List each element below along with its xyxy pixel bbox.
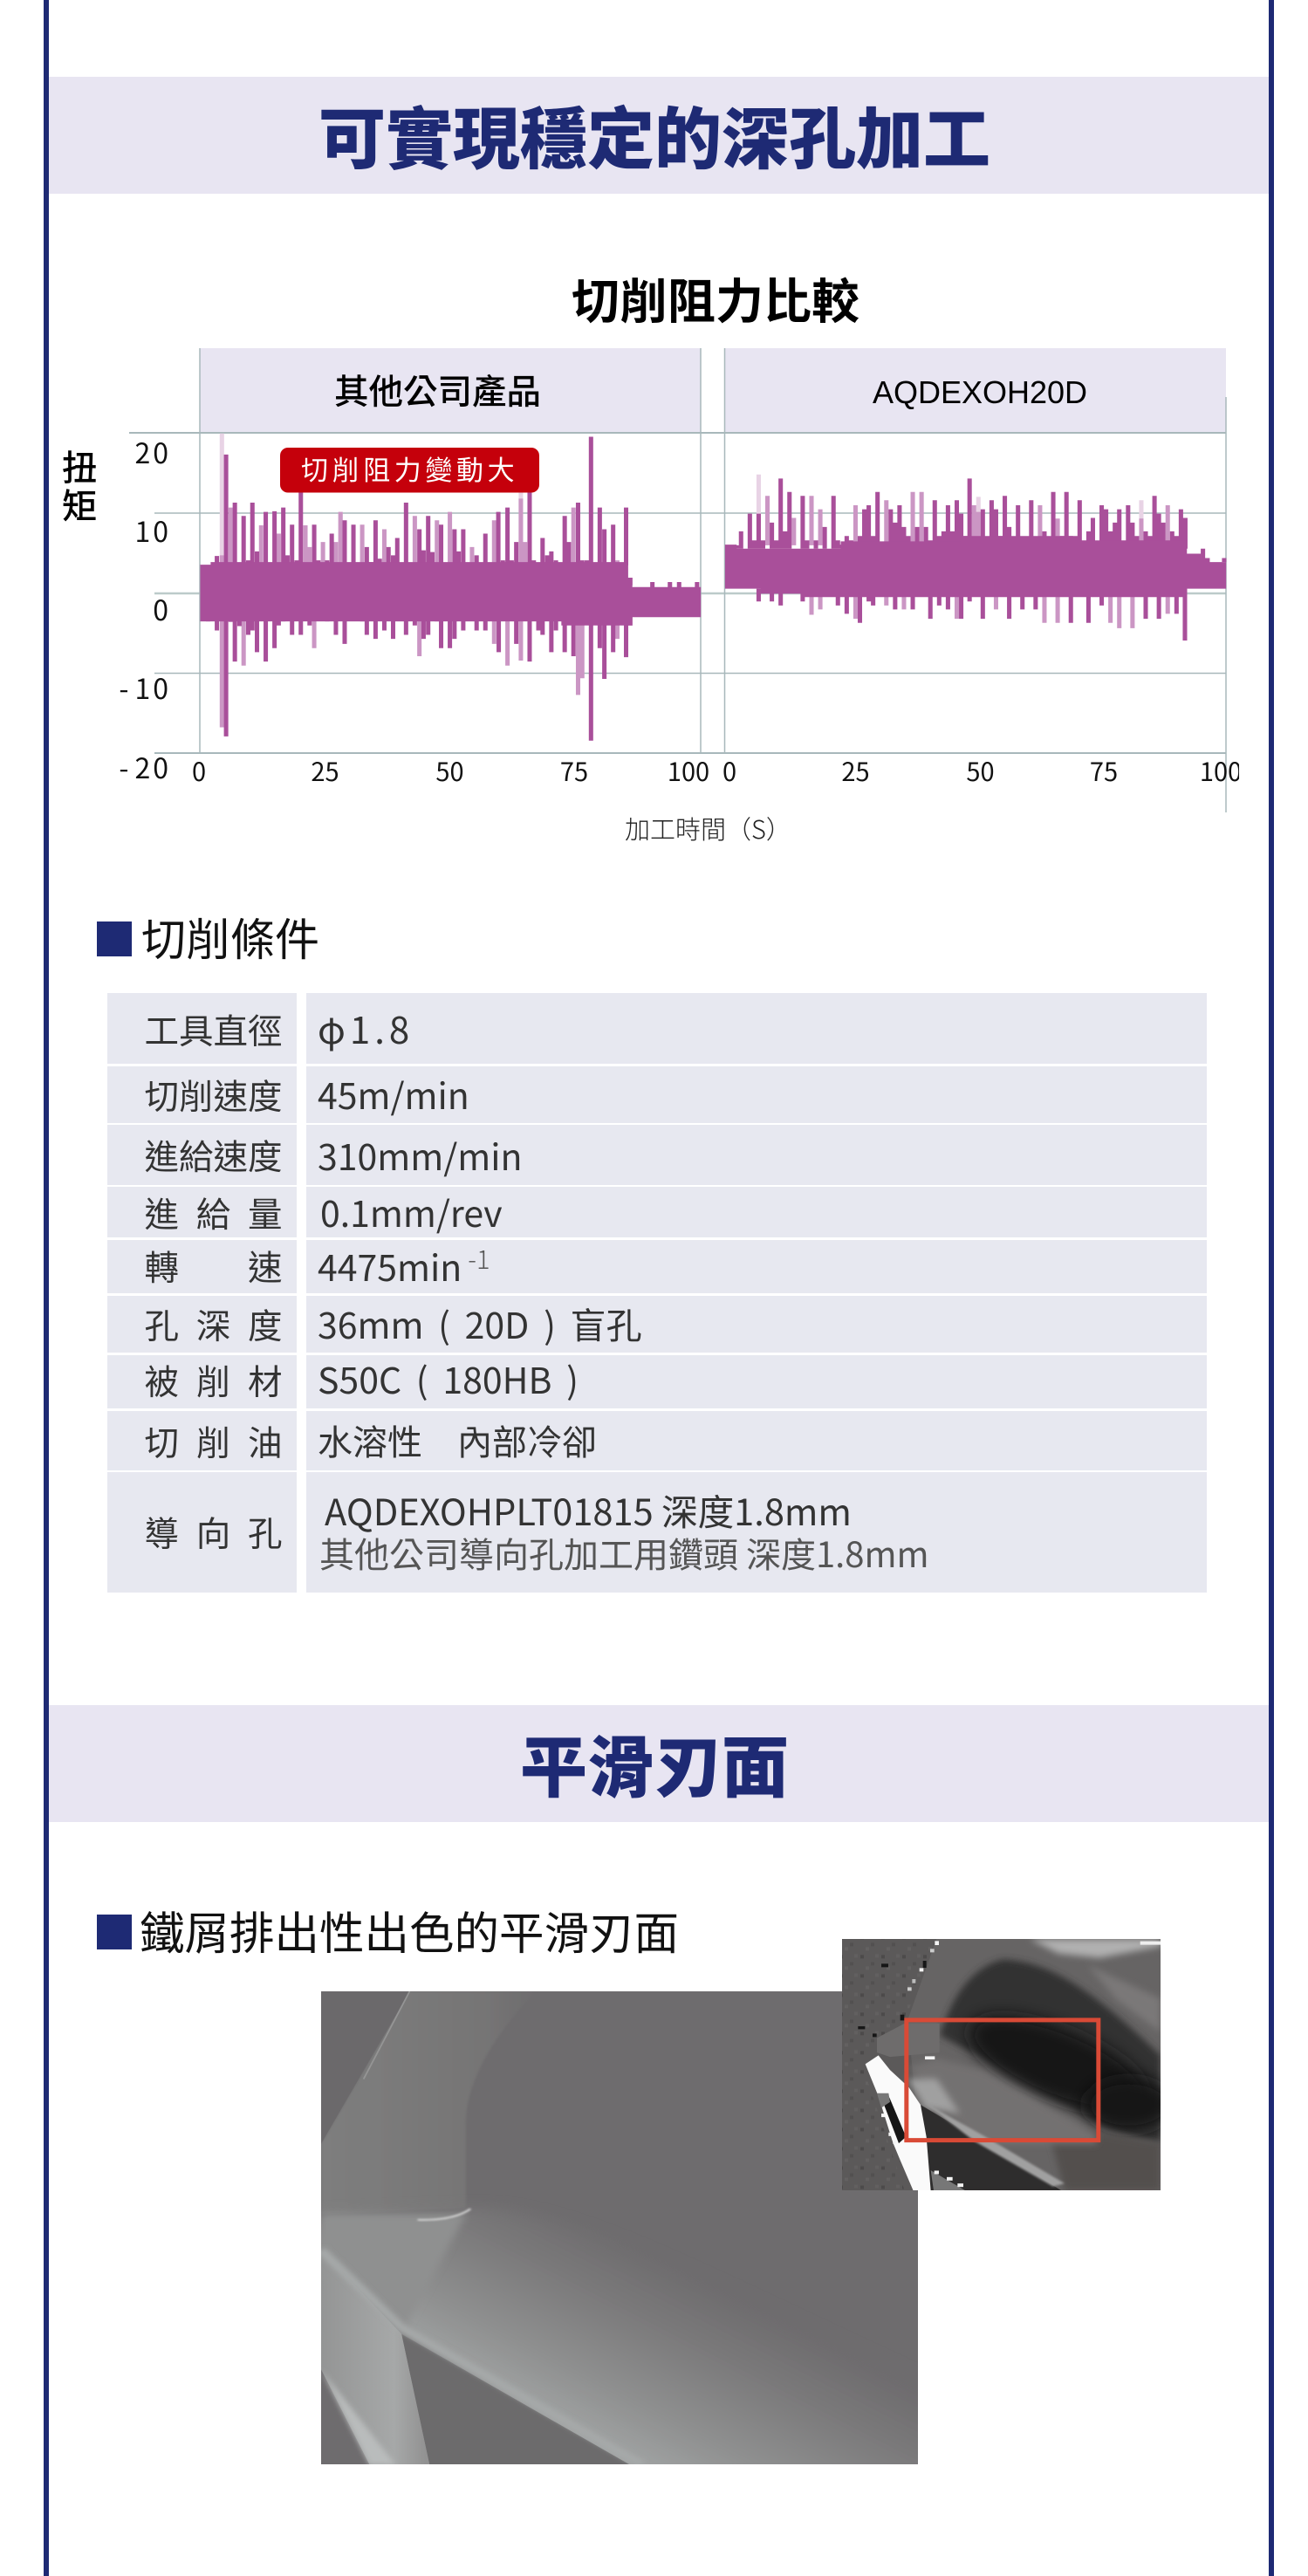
- photo: drill tip inset: [842, 1939, 1161, 2190]
- red highlight frame: [907, 2019, 1099, 2140]
- x axis labels: right chart: 75: [1090, 752, 1118, 789]
- row: feed: 進給量: [145, 1187, 283, 1237]
- row: feed: 0.1mm/rev: [320, 1185, 503, 1237]
- y axis title: 扭: [62, 440, 97, 490]
- row: cutting speed: 切削速度: [145, 1070, 283, 1120]
- section band: smooth flute: [49, 1705, 1269, 1822]
- row: feed speed: [107, 1125, 1207, 1185]
- y axis labels: -10: [119, 668, 171, 708]
- row: work material: S50C ( 180HB ): [318, 1352, 579, 1404]
- y axis title: [62, 440, 97, 529]
- row: work material: 被削材: [145, 1355, 283, 1405]
- bullet: cutting conditions: [96, 921, 132, 956]
- row: work material: [107, 1352, 1207, 1408]
- x axis labels: right chart: 0: [722, 752, 736, 789]
- guide hole line 2: 其他公司導向孔加工用鑽頭 深度1.8mm: [319, 1527, 929, 1578]
- right page border: [1269, 0, 1274, 2576]
- subheading: cutting conditions: 切削條件: [141, 904, 319, 969]
- row: guide hole: 導向孔: [145, 1506, 283, 1557]
- x axis labels: left chart: 100: [668, 752, 709, 789]
- row: cutting oil: 水溶性 內部冷卻: [318, 1415, 597, 1465]
- row: rotation speed: 4475min-1: [318, 1239, 490, 1291]
- subheading: chip evacuation: 鐵屑排出性出色的平滑刃面: [140, 1897, 679, 1963]
- row: feed speed: 310mm/min: [318, 1128, 523, 1181]
- photo: smooth flute surface: [321, 1991, 918, 2464]
- row: cutting oil: [107, 1411, 1207, 1470]
- row: tool diameter: 工具直徑: [145, 1004, 283, 1054]
- row: hole depth: 孔深度: [145, 1299, 283, 1349]
- y axis labels: [119, 432, 171, 787]
- row: hole depth: 36mm ( 20D ) 盲孔: [318, 1297, 642, 1349]
- row: tool diameter: [107, 993, 1207, 1064]
- y axis title: 矩: [62, 478, 97, 529]
- row: feed speed: 進給速度: [145, 1129, 283, 1180]
- header: AQDEXOH20D: [724, 348, 1226, 433]
- bullet: chip evacuation: [97, 1915, 132, 1949]
- chart: cutting resistance comparison: [62, 348, 1239, 846]
- waveform: other company: [200, 434, 701, 741]
- x axis labels: left chart: 75: [560, 752, 588, 789]
- x axis labels: right chart: 25: [841, 752, 870, 789]
- row: feed: [107, 1185, 1207, 1237]
- callout: large variation: 切削阻力變動大: [301, 449, 518, 488]
- x axis labels: right chart: 50: [966, 752, 995, 789]
- x axis labels: left chart: 50: [435, 752, 464, 789]
- row: guide hole: [107, 1472, 1207, 1593]
- header: other company product: 其他公司產品: [334, 365, 541, 414]
- upper relief: [321, 1991, 536, 2214]
- x axis title: 加工時間（S）: [625, 810, 791, 846]
- title: 可實現穩定的深孔加工: [318, 86, 990, 183]
- x axis labels: left chart: 0: [192, 752, 206, 789]
- x axis labels: left chart: [192, 752, 709, 789]
- row: cutting oil: 切削油: [145, 1415, 283, 1466]
- row: tool diameter: φ1.8: [318, 1002, 414, 1055]
- row: cutting speed: 45m/min: [318, 1067, 469, 1120]
- row: rotation speed: [107, 1239, 1207, 1293]
- row: cutting speed: [107, 1066, 1207, 1123]
- x axis labels: right chart: [722, 752, 1242, 789]
- chart heading: 切削阻力比較: [572, 263, 859, 332]
- y axis labels: 20: [134, 432, 171, 472]
- row: hole depth: [107, 1296, 1207, 1353]
- section band: stable deep hole machining: [49, 77, 1269, 194]
- table: cutting conditions: [107, 993, 1207, 1593]
- waveform: AQDEXOH20D: [725, 475, 1226, 641]
- x axis labels: left chart: 25: [311, 752, 339, 789]
- row: rotation speed: 轉速: [145, 1241, 283, 1291]
- y axis labels: 0: [153, 589, 171, 629]
- left page border: [44, 0, 49, 2576]
- header: AQDEXOH20D: AQDEXOH20D: [873, 374, 1087, 410]
- y axis labels: -20: [119, 747, 171, 787]
- title: 平滑刃面: [520, 1715, 789, 1812]
- y axis labels: 10: [134, 510, 171, 551]
- header: other company product: [200, 348, 701, 433]
- guide hole line 1: AQDEXOHPLT01815 深度1.8mm: [325, 1483, 852, 1536]
